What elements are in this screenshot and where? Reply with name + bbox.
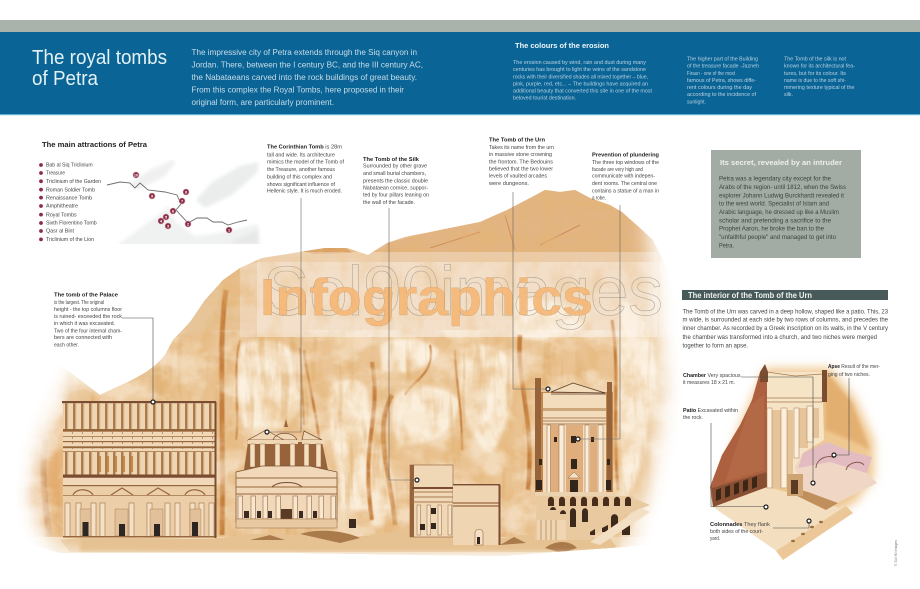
text: colours of the erosion: The erosion caused by wind, rain and dust during many xyxy=(513,60,646,66)
cutaway illustration xyxy=(710,364,877,560)
callout: tomb of the Palace: in which it was excavated. xyxy=(54,321,115,327)
text: tomb of the silk note xyxy=(784,57,855,98)
text: treasury facade note: of the treasure facade -Jazneh xyxy=(687,64,759,70)
watermark: Infographics: Infographics xyxy=(260,269,593,327)
attractions list: Renaissance Tomb xyxy=(46,195,92,201)
watermark: Sol90images: Sol90images xyxy=(263,252,663,330)
title xyxy=(32,47,167,90)
section text: m wide, is surrounded at each side by two rows of columns, and precedes the xyxy=(682,317,889,324)
map route xyxy=(107,182,247,225)
text: tomb of the silk note: silk. xyxy=(784,92,793,98)
tomb of the Palace xyxy=(62,401,216,538)
callout: Corinthian tomb: the Treasure, another famous xyxy=(267,167,335,173)
map: main attractions of Petra xyxy=(39,140,260,246)
callout: Corinthian tomb xyxy=(265,145,344,434)
callout: prevention of plundering: contains a statue of a man in xyxy=(592,188,659,194)
callout: tomb of the Urn: Takes its name from the urn xyxy=(489,145,554,151)
text: colours of the erosion: pink, purple, red, etc... – The buildings have acquired an xyxy=(513,81,648,87)
text: tomb of the silk note: The Tomb of the silk is not xyxy=(784,57,846,63)
callout: tomb of the Palace: The tomb of the Palace xyxy=(54,293,118,299)
panel: its secret, revealed by an intruder xyxy=(711,150,861,258)
text: colours of the erosion: rocks with their diversified shades all mixed together – blue, xyxy=(513,74,648,80)
callout: tomb of the Urn: believed that the two lower xyxy=(489,167,553,173)
pale haze band xyxy=(240,262,680,337)
section text: inner chamber. As recorded by a Greek inscription on its walls, in the V century xyxy=(682,325,889,332)
text: treasury facade note: according to the incidence of xyxy=(687,92,756,98)
attractions list: Roman Soldier Tomb xyxy=(46,187,95,193)
callout: prevention of plundering xyxy=(576,153,660,441)
header panel xyxy=(0,32,920,115)
intro text xyxy=(192,47,423,107)
callout: tomb of the Silk xyxy=(363,157,429,482)
top grey band xyxy=(0,20,920,32)
map marker numbers: 9 xyxy=(151,194,153,198)
panel text: Arabic language, he dressed up like a Muslim xyxy=(719,210,839,216)
title: of Petra xyxy=(32,68,99,90)
text: tomb of the silk note: name is due to the soft shi- xyxy=(784,78,846,84)
left orange rock xyxy=(28,421,63,537)
panel text: Petra was a legendary city except for the xyxy=(719,177,832,183)
callout: Corinthian tomb: mimics the model of the Tomb of xyxy=(267,160,344,166)
map markers xyxy=(133,172,232,233)
text: colours of the erosion: The colours of the erosion xyxy=(515,41,609,50)
map marker numbers: 8 xyxy=(185,190,187,194)
callout: tomb of the Palace: each other. xyxy=(54,343,79,349)
panel text: Prophet Aaron, he broke the ban to the xyxy=(719,227,825,233)
callout: tomb of the Urn xyxy=(488,138,554,391)
callout: tomb of the Urn: were dungeons. xyxy=(488,181,529,187)
attractions list: Treasure xyxy=(46,171,65,177)
attractions list: Bab al Siq Triclinium xyxy=(46,163,93,169)
callout: prevention of plundering: Prevention of plundering xyxy=(592,153,660,159)
callout: Corinthian tomb: building of this complex and xyxy=(267,174,332,180)
map marker numbers xyxy=(134,173,230,232)
Corinthian tomb xyxy=(236,419,356,528)
callout: tomb of the Silk: The Tomb of the Silk xyxy=(363,157,420,163)
callout: tomb of the Silk: Nabataean cornice, suppor- xyxy=(363,185,428,191)
callout: Corinthian tomb: tall and wide. Its architecture xyxy=(267,152,335,158)
watermark band xyxy=(257,252,657,337)
panel text xyxy=(719,177,846,249)
section heading bar xyxy=(682,290,888,300)
text: tomb of the silk note: mmering texture typical of the xyxy=(784,85,854,91)
section text: together to form an apse. xyxy=(682,342,748,349)
text: colours of the erosion: centuries has brought to light the veins of the sandstone xyxy=(513,67,646,73)
panel heading: Its secret, revealed by an intruder xyxy=(720,158,842,167)
text: treasury facade note: sunlight. xyxy=(687,99,706,105)
rocky ground xyxy=(41,530,636,556)
label: colonnades: Colonnades They flank xyxy=(710,522,770,528)
section heading bar: The interior of the Tomb of the Urn xyxy=(688,291,812,300)
tomb of the Silk xyxy=(410,465,500,545)
label: colonnades: both sides of the court- xyxy=(710,529,763,535)
intro text: the Nabataeans carved into the rock buildings of great beauty. xyxy=(192,72,417,82)
text: tomb of the silk note: known for its architectural fea- xyxy=(784,64,855,70)
panel text: Petra. xyxy=(719,243,734,249)
text: tomb of the silk note: tures, but for its colour. Its xyxy=(784,71,846,77)
panel text: to the west world. Specialist of Islam and xyxy=(719,202,829,208)
callout: tomb of the Palace: is the largest. The original xyxy=(54,300,104,306)
callout: tomb of the Palace: is ruined- exceeded the rock xyxy=(54,314,122,320)
title: The royal tombs xyxy=(32,47,167,69)
attractions list: Sixth Florentino Tomb xyxy=(46,221,97,227)
rock texture xyxy=(48,337,654,537)
attractions list: Triclinium of the Lion xyxy=(46,237,94,243)
callout: tomb of the Silk: ted by four pillars leaning on xyxy=(363,193,429,199)
callout: Corinthian tomb: Hellenic style. It is much eroded. xyxy=(267,189,342,195)
callout: tomb of the Silk: presents the classic double xyxy=(363,178,428,184)
callout: tomb of the Urn: the frontom. The Bedouins xyxy=(489,159,553,165)
attractions list: Qasr al Bint xyxy=(46,229,74,235)
label: patio: Patio Excavated within xyxy=(683,408,738,414)
cliffs base colour xyxy=(76,337,640,555)
callout: tomb of the Palace: bers are connected with xyxy=(54,335,112,341)
label: apse: Apse Result of the mer- xyxy=(828,364,880,370)
callout: prevention of plundering: dent rooms. The central one xyxy=(592,181,657,187)
callout: tomb of the Silk: Surrounded by other grave xyxy=(363,164,427,170)
intro text: Jordan. There, between the I century BC, and the III century AC, xyxy=(192,60,423,70)
rock massif illustration xyxy=(20,190,676,556)
map marker numbers: 7 xyxy=(181,199,183,203)
map heading: The main attractions of Petra xyxy=(42,140,148,149)
callout: tomb of the Urn: in massive stone crowning xyxy=(489,152,552,158)
panel text: "unfaithful people" and managed to get into xyxy=(719,235,837,241)
upper rock ridge shading xyxy=(100,190,670,400)
text: treasury facade note: famous of Petra, shows diffe- xyxy=(687,78,756,84)
callout: tomb of the Palace xyxy=(54,293,155,404)
callout: tomb of the Urn: levels of vaulted arcades xyxy=(489,174,547,180)
map marker numbers: 2 xyxy=(187,222,189,226)
callout: tomb of the Palace: Two of the four internal cham- xyxy=(54,328,122,334)
attractions list: Amphitheatre xyxy=(46,204,78,210)
label: chamber: it measures 18 x 21 m. xyxy=(683,380,735,386)
callout: tomb of the Silk: the wall of the facade. xyxy=(363,200,415,206)
attractions list xyxy=(39,163,101,243)
map marker numbers: 4 xyxy=(160,219,163,223)
intro text: From this complex the Royal Tombs, here proposed in their xyxy=(192,84,404,94)
text: colours of the erosion: additional beauty that converted this site in one of the most xyxy=(513,88,652,94)
tomb of the Urn xyxy=(535,378,650,545)
label: chamber: Chamber Very spacious, xyxy=(683,373,742,379)
label: colonnades xyxy=(710,519,811,542)
section text xyxy=(682,308,889,349)
label: colonnades: yard. xyxy=(710,536,720,542)
callout: prevention of plundering: The three top windows of the xyxy=(592,160,659,166)
dark cliff fissures xyxy=(43,290,618,545)
section text: The Tomb of the Urn was carved in a deep hollow, shaped like a patio. This, 23 xyxy=(682,308,889,315)
panel text: scholar and pretending a sacrifice to the xyxy=(719,218,832,224)
callout: tomb of the Silk: and small burial chambers, xyxy=(363,171,426,177)
map relief xyxy=(116,160,260,246)
callout: tomb of the Palace: height - the top columns floor xyxy=(54,307,122,313)
callout: tomb of the Urn: The Tomb of the Urn xyxy=(489,138,546,144)
intro text: The impressive city of Petra extends through the Siq canyon in xyxy=(192,47,417,57)
callout: Corinthian tomb: shows significant influence of xyxy=(267,182,335,188)
text: colours of the erosion: beloved tourist destination. xyxy=(513,95,576,101)
text: treasury facade note: rent colours during the day xyxy=(687,85,752,91)
text: treasury facade note: The higher part of the Building xyxy=(687,57,758,63)
map marker numbers: 3 xyxy=(167,224,169,228)
attractions list: Royal Tombs xyxy=(46,212,77,218)
map marker numbers: 6 xyxy=(172,209,174,213)
label: apse xyxy=(828,364,880,457)
section text: the chamber was transformed into a church, and two niches were merged xyxy=(682,334,878,341)
intro text: original form, are particularly prominent. xyxy=(192,97,334,107)
text: colours of the erosion xyxy=(513,41,652,101)
panel text: Arabs of the region- until 1812, when the Swiss xyxy=(719,185,846,191)
label: patio xyxy=(683,408,768,509)
callout: prevention of plundering: communicate with indepen- xyxy=(592,174,655,180)
map marker numbers: 10 xyxy=(134,173,138,177)
text: treasury facade note xyxy=(687,57,759,105)
label: apse: ging of two niches. xyxy=(828,372,870,378)
map marker numbers: 1 xyxy=(228,228,230,232)
text: treasury facade note: Firaun - one of the most xyxy=(687,71,735,77)
callout: prevention of plundering: a robe. xyxy=(592,195,606,201)
map marker numbers: 5 xyxy=(165,215,167,219)
credit: © Sol 90 Images xyxy=(894,540,898,566)
callout: Corinthian tomb: The Corinthian Tomb is 28m xyxy=(267,145,342,151)
section: interior of the tomb of the Urn xyxy=(682,290,889,560)
callout: prevention of plundering: facade are very high and xyxy=(592,167,643,173)
cream blocks of the cliffs xyxy=(237,298,656,527)
label: chamber xyxy=(683,373,815,485)
label: patio: the rock. xyxy=(683,415,703,421)
attractions list: Triclinium of the Garden xyxy=(46,179,101,185)
panel text: explorer Johann Ludwig Burckhardt revealed it xyxy=(719,193,844,199)
